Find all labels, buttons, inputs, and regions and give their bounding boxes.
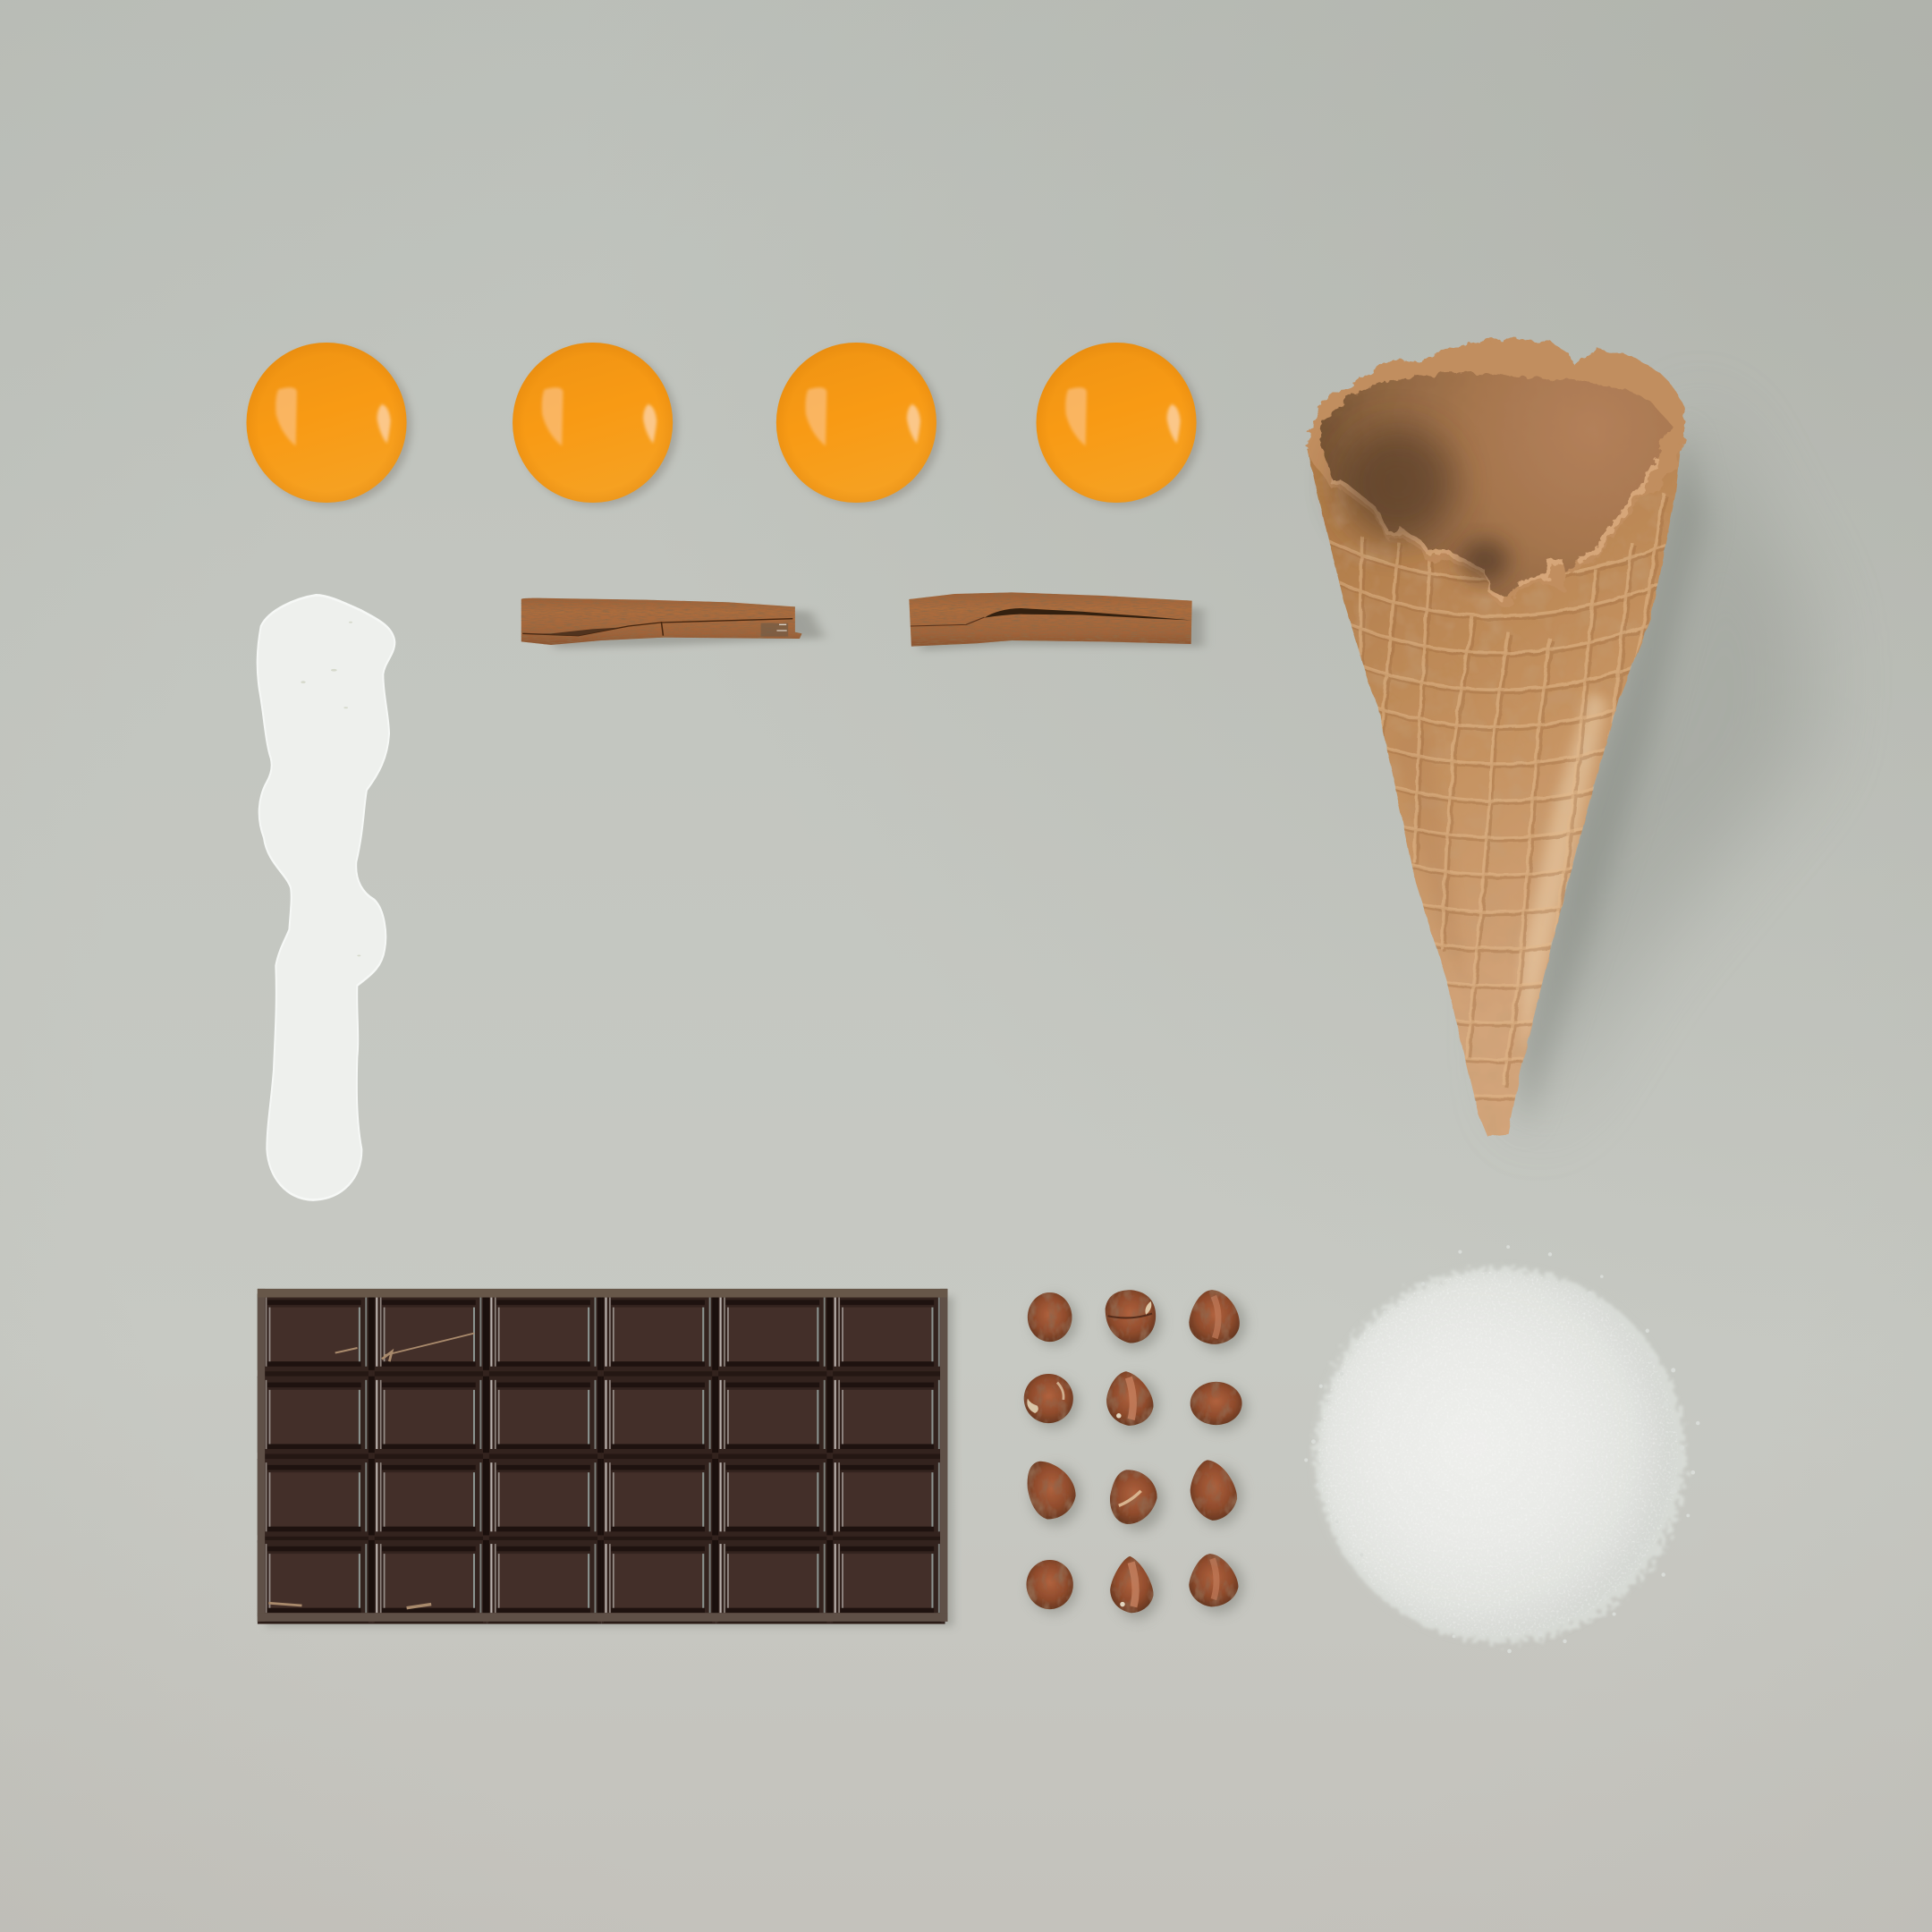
hazelnuts grid: [1024, 1290, 1247, 1619]
waffle cone: [1306, 340, 1811, 1140]
chocolate squares: [258, 1293, 945, 1624]
nut row 4: [1027, 1554, 1243, 1619]
nut row 2: [1024, 1371, 1247, 1432]
rim ring: [1308, 340, 1683, 606]
cinnamon stick 1: [521, 598, 825, 648]
scratches: [268, 1334, 474, 1608]
cone upper rim and interior: [1308, 340, 1683, 606]
milk flecks: [301, 622, 360, 956]
front lip highlight: [1335, 459, 1655, 599]
cone body: [1308, 407, 1683, 1136]
cinnamon stick 2: [909, 592, 1203, 650]
bar edges: [258, 1289, 947, 1622]
scattered sugar grains: [1304, 1245, 1699, 1653]
milk splash: [258, 595, 394, 1200]
chocolate bar: [258, 1289, 953, 1626]
interior shade: [1342, 427, 1509, 581]
sugar pile: [1304, 1245, 1699, 1653]
nut row 3: [1028, 1460, 1242, 1530]
cone shadow: [1518, 394, 1811, 1140]
yolk 1: [247, 343, 411, 506]
egg yolks row: [247, 343, 1201, 506]
yolk 3: [776, 343, 941, 506]
yolk 4: [1037, 343, 1201, 506]
cone interior: [1321, 373, 1670, 597]
yolk 2: [513, 343, 678, 506]
cone highlights: [1519, 690, 1610, 1041]
nut row 1: [1028, 1290, 1246, 1351]
waffle grid: [1329, 492, 1669, 1102]
